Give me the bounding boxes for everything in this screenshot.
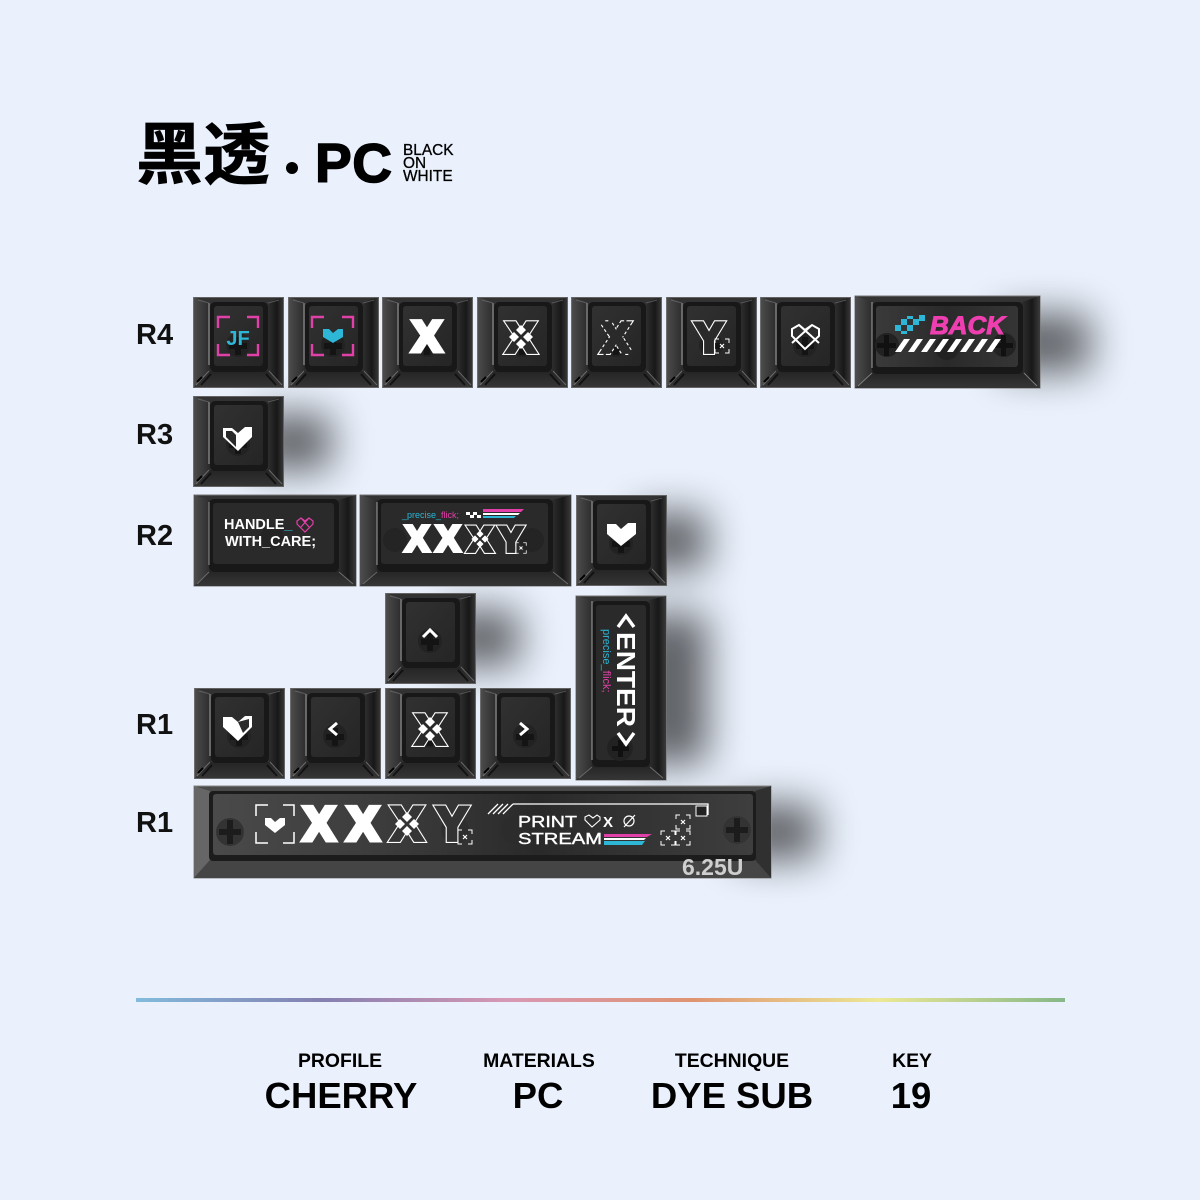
X outline: X: [391, 797, 423, 850]
frame brackets: [218, 317, 258, 355]
key: R4 heart frame: [288, 297, 379, 388]
focus icons: [661, 815, 690, 845]
key: handle with care: [194, 495, 356, 586]
key: R4 logo: [193, 297, 284, 388]
key: backspace: [855, 296, 1040, 388]
frame brackets and heart: [256, 805, 294, 843]
key: precise flick XXXY: [360, 495, 571, 586]
STREAM legend: STREAM: [518, 831, 602, 848]
row labels: [136, 319, 173, 839]
label R1 upper: R1: [136, 709, 173, 741]
tagline: precise_ flick;: [600, 629, 612, 693]
icon: pink heart: [297, 518, 313, 532]
key: R4 dashed X: X: [602, 314, 630, 361]
spec: materials: PC: [513, 1075, 563, 1116]
key: R4 Y: [666, 297, 757, 388]
brand mark: JF: [226, 328, 250, 350]
key: precise flick XXXY: Y: [500, 521, 523, 559]
tagline: _precise_flick;: [401, 510, 459, 520]
key: spacebar 6.25U: X: [347, 797, 379, 850]
title: separator dot: [286, 162, 298, 174]
title: black on white: [403, 142, 454, 185]
key: spacebar 6.25U: Y: [436, 797, 468, 850]
spec: profile: PROFILE: [298, 1050, 382, 1072]
XX solid: X: [405, 518, 429, 559]
spec: key: KEY: [892, 1050, 932, 1072]
key: R1 outline X: [385, 688, 476, 779]
pixel mark: [466, 512, 481, 518]
spec: technique: DYE SUB: [651, 1075, 813, 1116]
spec: technique: TECHNIQUE: [675, 1050, 789, 1072]
ENTER legend: ENTER: [611, 632, 641, 727]
heart x slash icons: [585, 815, 600, 827]
key: R3 heart: [193, 396, 284, 487]
label R4: R4: [136, 319, 173, 351]
frame brackets: [312, 317, 353, 355]
arrow brackets: [618, 616, 634, 744]
key: up arrow: [385, 593, 476, 684]
focus icon: [458, 830, 472, 844]
PRINT legend: PRINT: [518, 814, 577, 831]
title: black on white: ON: [403, 155, 426, 172]
spec: materials: [483, 1050, 595, 1116]
Y outline: Y: [436, 797, 468, 850]
size label: 6.25U: [682, 854, 743, 880]
stripes: [604, 834, 652, 837]
spec: profile: CHERRY: [265, 1075, 417, 1116]
key: R4 Y: Y: [695, 314, 723, 361]
title: [136, 101, 454, 198]
key: R1 outline X: X: [416, 706, 444, 753]
title: black on white: WHITE: [403, 168, 453, 185]
focus icon: [516, 543, 526, 553]
key: R1 outline X: X: [416, 706, 444, 753]
spec: key: [891, 1050, 932, 1116]
slash stripes and header line: [488, 804, 708, 815]
key: R4 dashed X: X: [602, 314, 630, 361]
hazard stripes: [895, 339, 1001, 352]
small X box: [696, 806, 707, 816]
key: precise flick XXXY: X: [469, 521, 492, 559]
key: right arrow: [480, 688, 571, 779]
Y outline: Y: [500, 521, 523, 559]
key: spacebar 6.25U: X: [391, 797, 423, 850]
spec: materials: MATERIALS: [483, 1050, 595, 1072]
BACK legend: BACK: [930, 312, 1007, 340]
spec: profile: [265, 1050, 417, 1116]
key shadows: [255, 314, 1090, 860]
key: R4 solid X: X: [413, 313, 442, 361]
icon: cyan heart: [323, 329, 343, 343]
spec: key: 19: [891, 1075, 931, 1116]
label R3: R3: [136, 419, 173, 451]
key: R4 solid X: [382, 297, 473, 388]
key: enter: [576, 596, 666, 780]
XX solid: X: [303, 797, 335, 850]
icon: cyan pixels: [895, 315, 925, 334]
legend text: HANDLE_: [224, 517, 293, 533]
X outline: X: [469, 521, 492, 559]
key: R4 dashed X: [571, 297, 662, 388]
key: precise flick XXXY: X: [436, 518, 460, 559]
title: black on white: BLACK: [403, 142, 454, 159]
key: left arrow: [290, 688, 381, 779]
key: R4 outline X: X: [507, 314, 535, 361]
key: spacebar 6.25U: X: [603, 814, 613, 831]
key: handle with care: WITH_CARE;: [225, 534, 316, 550]
key: R4 outline heart: [760, 297, 851, 388]
title: chinese name: 黑透: [136, 101, 270, 198]
label R1 lower: R1: [136, 807, 173, 839]
title: PC: PC: [315, 132, 392, 194]
spec: technique: [651, 1050, 813, 1116]
stripes: [483, 509, 524, 512]
key: R1 heart: [194, 688, 285, 779]
label R2: R2: [136, 520, 173, 552]
key: R2 heart: [576, 495, 667, 586]
key: R4 Y: Y: [695, 314, 723, 361]
key: spacebar 6.25U: [194, 786, 771, 880]
rainbow divider: [136, 998, 1065, 1002]
key: R4 outline X: [477, 297, 568, 388]
key: R4 outline X: X: [507, 314, 535, 361]
